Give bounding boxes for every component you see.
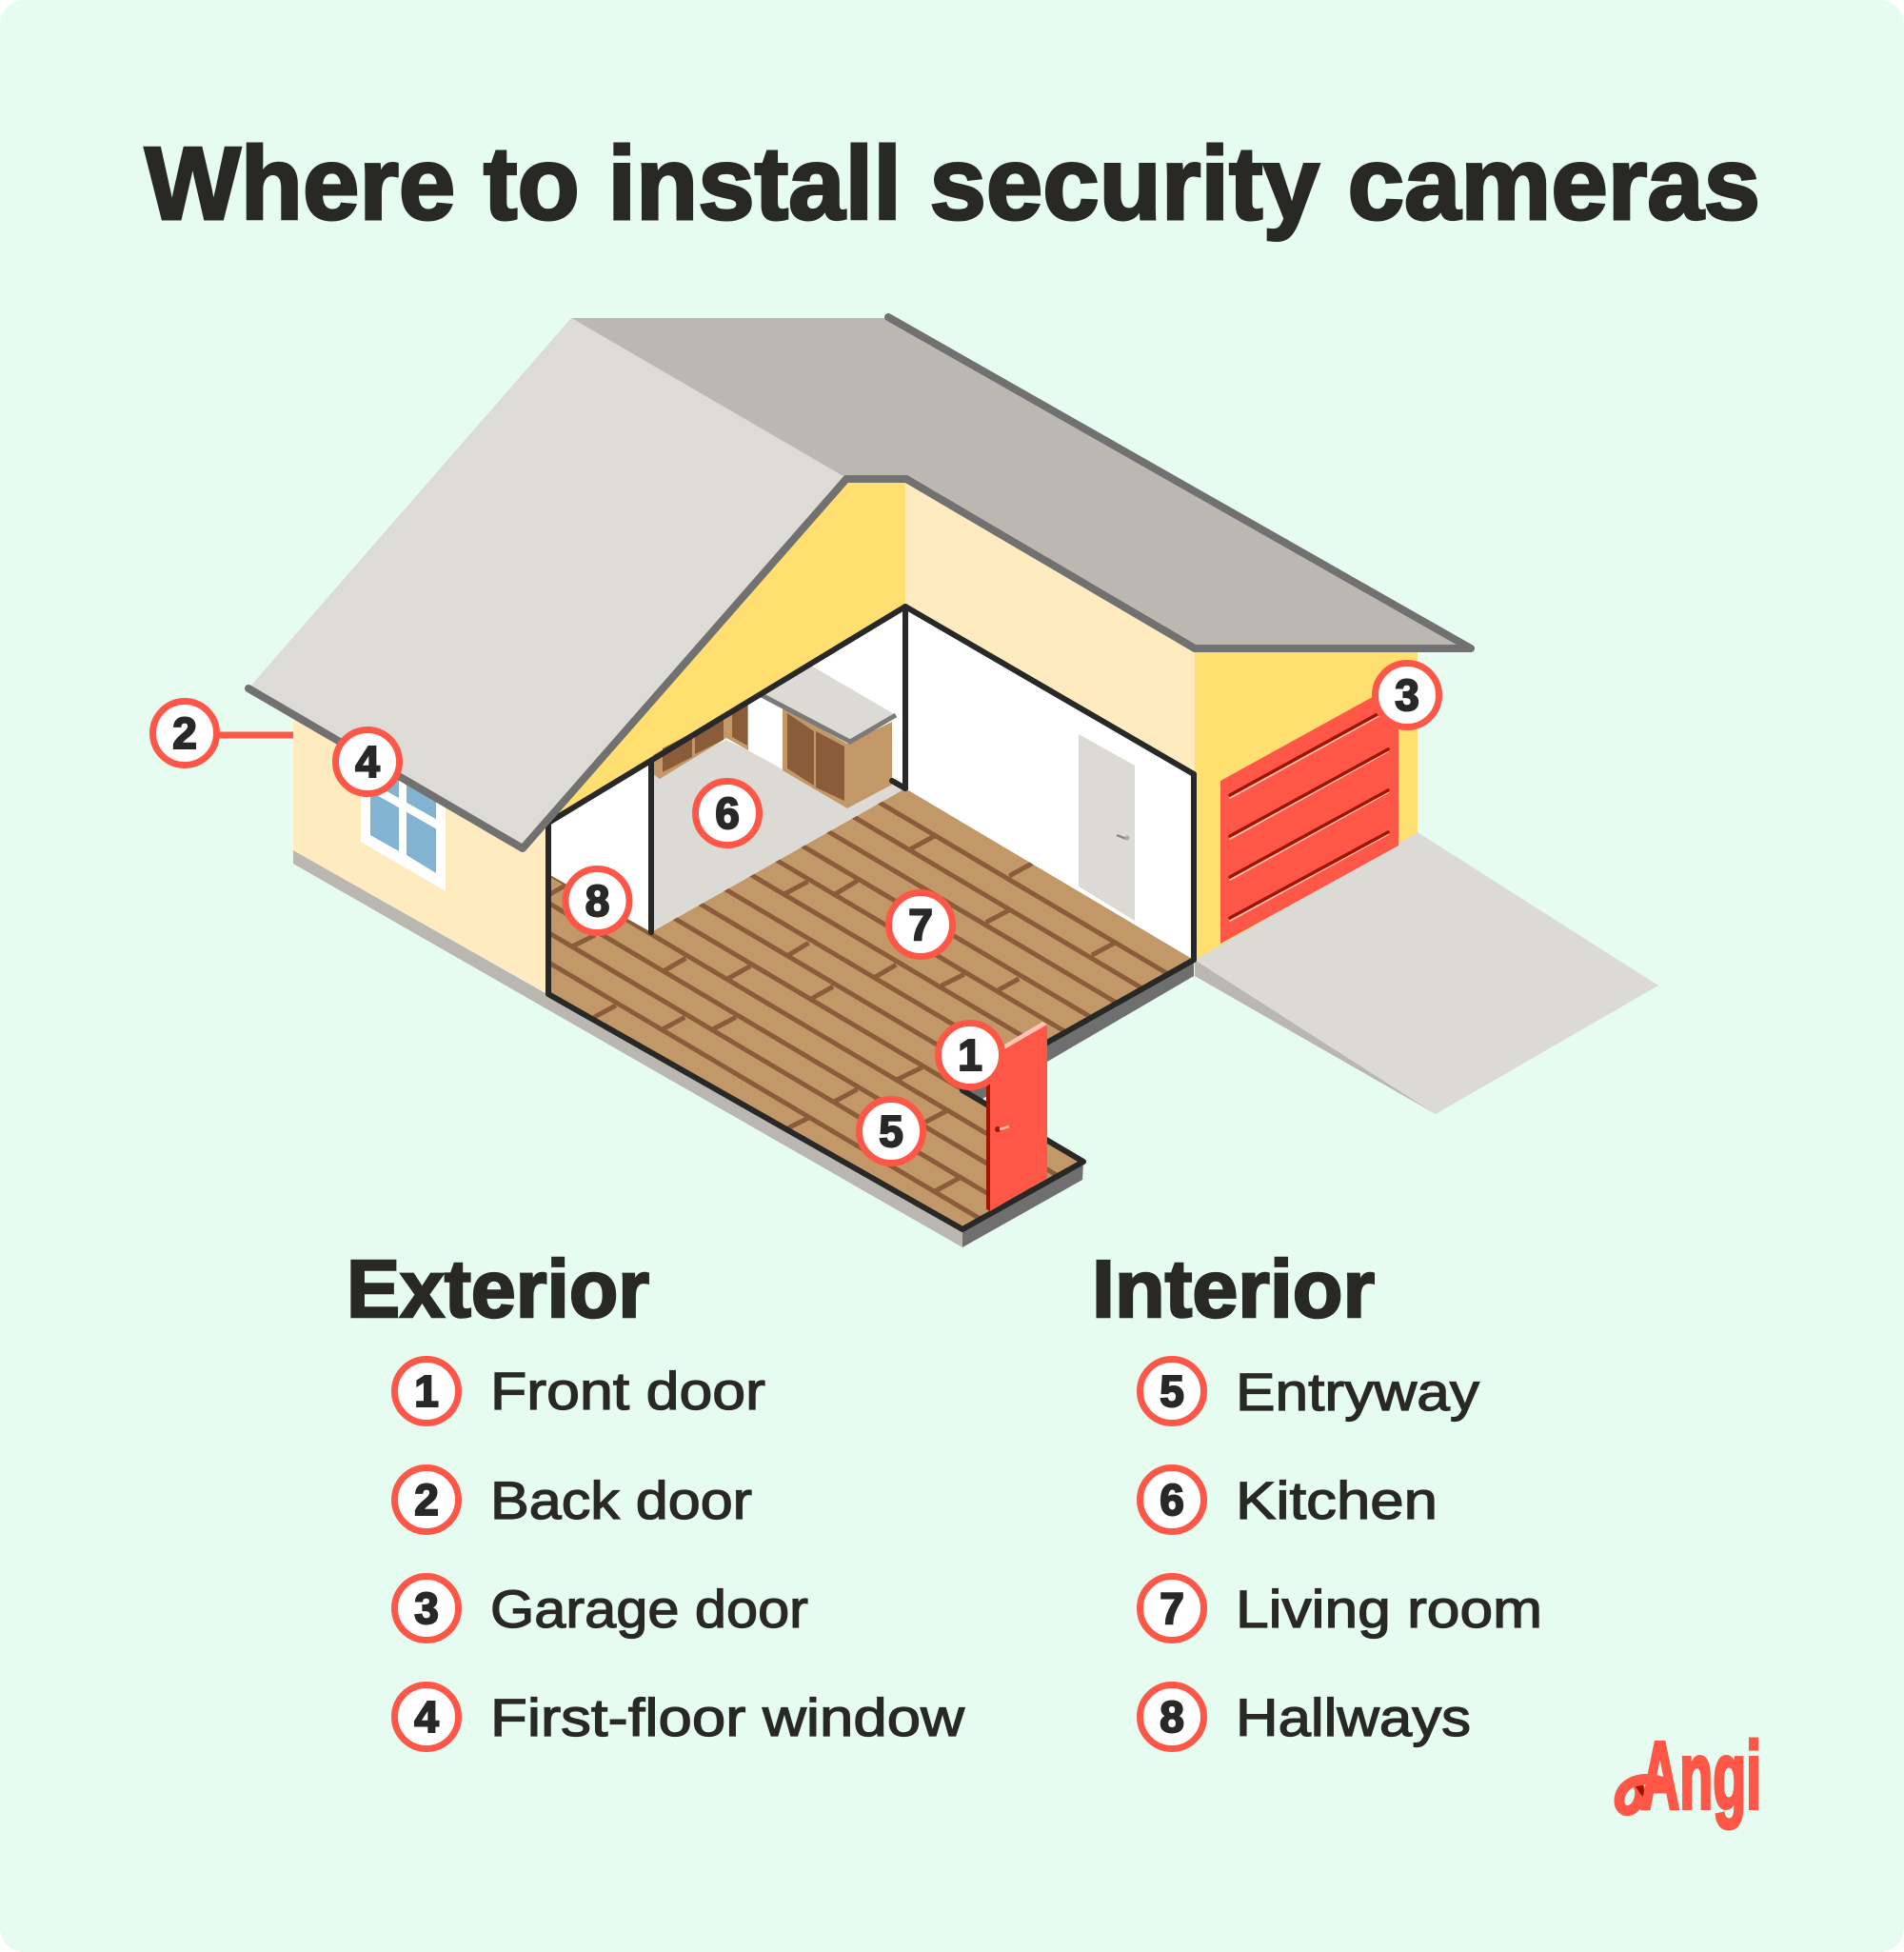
kitchen <box>651 666 905 932</box>
marker 2 <box>152 701 217 766</box>
foundation strips <box>293 850 1194 1247</box>
marker 3: 3 <box>1395 670 1419 720</box>
interior walls <box>548 607 1194 960</box>
back wing cream wall <box>293 705 548 994</box>
yellow gable wall <box>543 478 905 825</box>
item: back door <box>394 1468 752 1531</box>
driveway <box>1195 832 1658 1114</box>
garage wall <box>1195 648 1418 960</box>
cream side wall <box>905 478 1195 781</box>
marker 5 <box>859 1099 923 1164</box>
first-floor window <box>361 752 446 891</box>
marker 6 <box>695 781 760 846</box>
item: entryway: Entryway <box>1236 1362 1479 1422</box>
item: garage door <box>394 1577 808 1640</box>
item: living room <box>1140 1577 1542 1640</box>
right cabinet <box>783 707 892 808</box>
item: living room: Living room <box>1236 1579 1542 1639</box>
marker 8: 8 <box>585 876 609 926</box>
item: back door: 2 <box>414 1475 439 1524</box>
item: first-floor window: 4 <box>414 1692 439 1742</box>
item: hallways <box>1140 1685 1471 1748</box>
title: Where to install security cameras <box>145 126 1760 242</box>
kitchen floor <box>651 740 905 932</box>
Angi logo: Angi <box>1640 1723 1761 1829</box>
item: kitchen <box>1140 1468 1438 1531</box>
left cabinets <box>653 700 748 779</box>
connector line: back door <box>217 731 293 739</box>
wood floor <box>551 790 1191 1226</box>
marker 6: 6 <box>715 788 740 838</box>
item: hallways: Hallways <box>1236 1687 1471 1747</box>
black outlines <box>548 607 1194 1229</box>
house illustration <box>248 317 1658 1349</box>
marker 1: 1 <box>958 1030 982 1080</box>
marker 8 <box>565 868 629 933</box>
marker 4 <box>335 729 400 794</box>
item: back door: Back door <box>490 1470 752 1530</box>
interior legend <box>1092 1245 1542 1748</box>
marker 4: 4 <box>355 737 380 787</box>
marker 7 <box>889 893 952 956</box>
marker 3 <box>1375 663 1439 727</box>
marker 2: 2 <box>172 708 197 758</box>
exterior legend <box>347 1245 965 1748</box>
roof edge stroke <box>248 317 1471 848</box>
item: kitchen: Kitchen <box>1236 1470 1438 1530</box>
item: entryway <box>1140 1360 1479 1423</box>
item: kitchen: 6 <box>1160 1475 1184 1524</box>
item: front door <box>394 1360 765 1423</box>
item: entryway: 5 <box>1160 1366 1184 1416</box>
Angi logo <box>1619 1723 1761 1829</box>
item: front door: Front door <box>490 1361 765 1421</box>
marker 7: 7 <box>908 900 933 949</box>
roof dark plane <box>571 318 1471 648</box>
interior heading: Interior <box>1092 1245 1375 1335</box>
garage door <box>1220 683 1398 944</box>
item: first-floor window <box>394 1685 965 1748</box>
roof <box>248 317 1471 848</box>
item: garage door: Garage door <box>490 1579 808 1639</box>
marker 1 <box>939 1023 1002 1087</box>
countertop <box>760 666 896 742</box>
interior door <box>1079 734 1135 921</box>
item: first-floor window: First-floor window <box>490 1687 965 1747</box>
item: living room: 7 <box>1160 1584 1184 1633</box>
item: hallways: 8 <box>1160 1692 1184 1742</box>
front door <box>986 1022 1047 1211</box>
item: garage door: 3 <box>414 1584 439 1633</box>
marker 5: 5 <box>879 1106 903 1156</box>
roof light plane <box>248 318 846 848</box>
item: front door: 1 <box>414 1366 439 1416</box>
exterior heading: Exterior <box>347 1245 649 1335</box>
